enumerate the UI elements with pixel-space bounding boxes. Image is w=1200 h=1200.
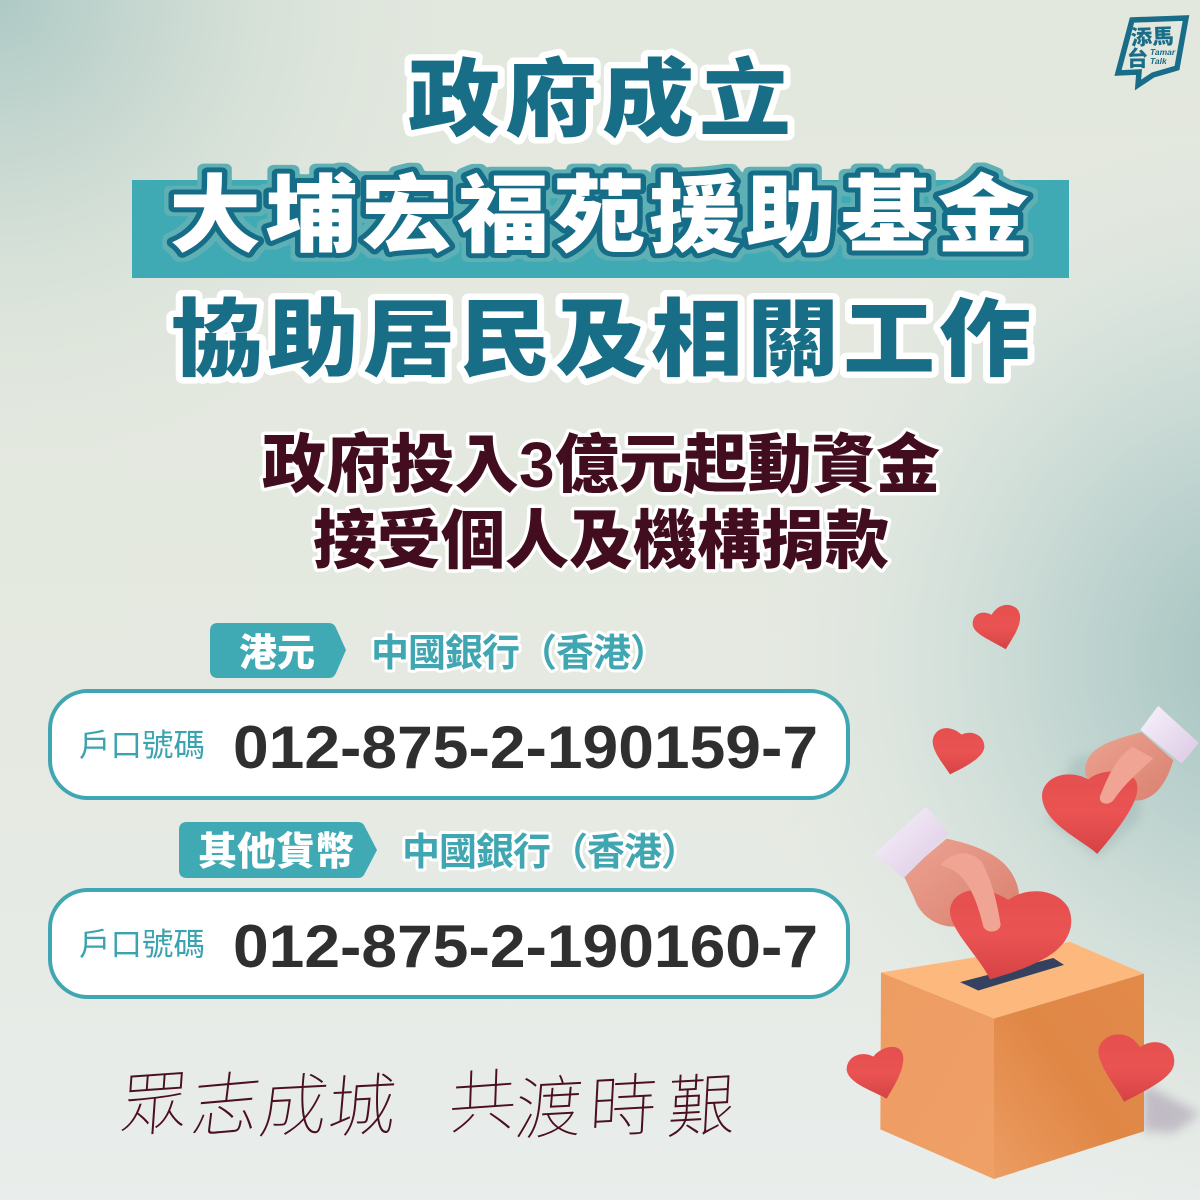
illustration: donation box with hands and hearts (847, 605, 1200, 1179)
account box 1: 戶口號碼 (79, 727, 205, 763)
subtitle line 1: 政府投入3億元起動資金 (262, 429, 940, 501)
handwritten slogan: 時 (587, 1049, 660, 1152)
box shadow (1143, 1083, 1200, 1133)
handwritten slogan: 成 (255, 1049, 335, 1152)
tag: HKD: 港元 (239, 633, 315, 675)
account box 2: 012-875-2-190160-7 (233, 913, 818, 980)
bank name 1: 中國銀行（香港） (371, 633, 668, 675)
account box 1: 012-875-2-190159-7 (233, 714, 818, 781)
bank name 2: 中國銀行（香港） (402, 832, 699, 874)
logo: Tamar Talk speech bubble (1118, 18, 1186, 85)
account box 2: 戶口號碼 (79, 926, 205, 962)
tag: other currencies (179, 822, 377, 878)
heart bottom right (1098, 1034, 1174, 1102)
logo: Tamar Talk speech bubble: 添馬 (1130, 26, 1174, 50)
account box 1 (50, 691, 848, 798)
left hand with heart (876, 808, 1071, 979)
account box 2 (50, 890, 848, 997)
handwritten slogan: 城 (324, 1049, 401, 1152)
title banner (132, 180, 1069, 278)
handwritten slogan: 渡 (511, 1051, 588, 1154)
logo: Tamar Talk speech bubble: Tamar (1150, 47, 1176, 57)
box (880, 942, 1144, 1179)
subtitle line 2: 接受個人及機構捐款 (313, 505, 889, 577)
title line 3: 協助居民及相關工作 (171, 292, 1035, 387)
floating heart middle (933, 728, 984, 774)
handwritten slogan (118, 1044, 738, 1154)
handwritten slogan: 艱 (665, 1049, 738, 1152)
floating heart top (973, 605, 1020, 649)
handwritten slogan: 志 (187, 1046, 267, 1152)
heart bottom left (847, 1047, 903, 1099)
title line 1: 政府成立 (408, 52, 796, 147)
logo: Tamar Talk speech bubble: 台 (1127, 47, 1148, 71)
handwritten slogan: 共 (447, 1044, 519, 1148)
tag: HKD (210, 623, 346, 678)
right hand with heart (1042, 707, 1197, 858)
logo: Tamar Talk speech bubble: Talk (1150, 56, 1168, 66)
handwritten slogan: 眾 (118, 1046, 192, 1150)
tag: other currencies: 其他貨幣 (198, 831, 354, 874)
title line 2: 大埔宏福苑援助基金 (169, 168, 1033, 263)
